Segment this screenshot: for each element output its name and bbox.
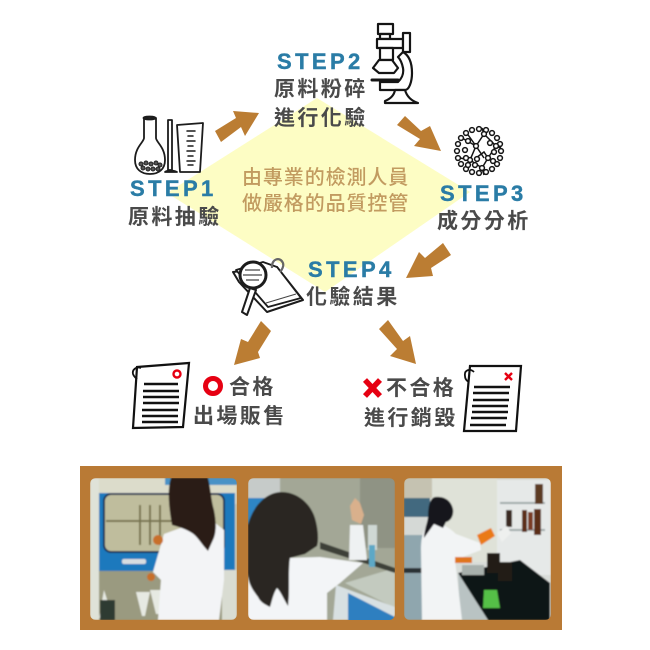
yellow centre shape (167, 98, 470, 292)
photo: analyst at fume hood (90, 478, 237, 620)
photo: analyst at lab bench (404, 478, 551, 620)
icon: molecule sphere (455, 127, 503, 175)
centre statement (242, 166, 409, 215)
pass label (193, 376, 287, 428)
fail label (364, 377, 458, 430)
photo panel background (80, 466, 562, 630)
icon: red circle (206, 378, 220, 394)
photo: analyst at biosafety cabinet (248, 478, 395, 625)
icon: red cross (365, 380, 380, 396)
pass label: 合格 (229, 376, 276, 399)
centre statement: 做嚴格的品質控管 (242, 192, 409, 215)
icon: fail document (464, 366, 521, 431)
step 2 label: 原料粉碎 (274, 78, 368, 101)
step 1 label (128, 176, 222, 229)
pass label: 出場販售 (193, 405, 287, 428)
centre statement: 由專業的檢測人員 (242, 166, 409, 189)
icon: glassware (135, 116, 203, 174)
step 4 label: 化驗結果 (306, 285, 400, 309)
arrow: step 4 to pass (234, 321, 271, 365)
icon: microscope (372, 24, 418, 103)
step 3 label (437, 181, 531, 233)
icon: clipboard and magnifier (233, 259, 303, 315)
fail label: 進行銷毀 (364, 407, 458, 430)
step 2 label: STEP2 (277, 49, 364, 74)
fail label: 不合格 (386, 377, 456, 400)
arrow: step 3 to step 4 (406, 243, 451, 278)
icon: pass document (133, 363, 189, 428)
arrow: step 1 to step 2 (215, 111, 259, 142)
step 2 label: 進行化驗 (274, 106, 368, 130)
step 3 label: STEP3 (440, 181, 527, 206)
step 1 label: 原料抽驗 (128, 205, 222, 229)
arrow: step 4 to fail (379, 320, 416, 364)
step 2 label (274, 49, 368, 130)
step 4 label: STEP4 (308, 257, 395, 282)
step 3 label: 成分分析 (437, 209, 531, 233)
step 1 label: STEP1 (130, 176, 217, 201)
step 4 label (306, 257, 400, 309)
arrow: step 2 to step 3 (397, 116, 441, 151)
